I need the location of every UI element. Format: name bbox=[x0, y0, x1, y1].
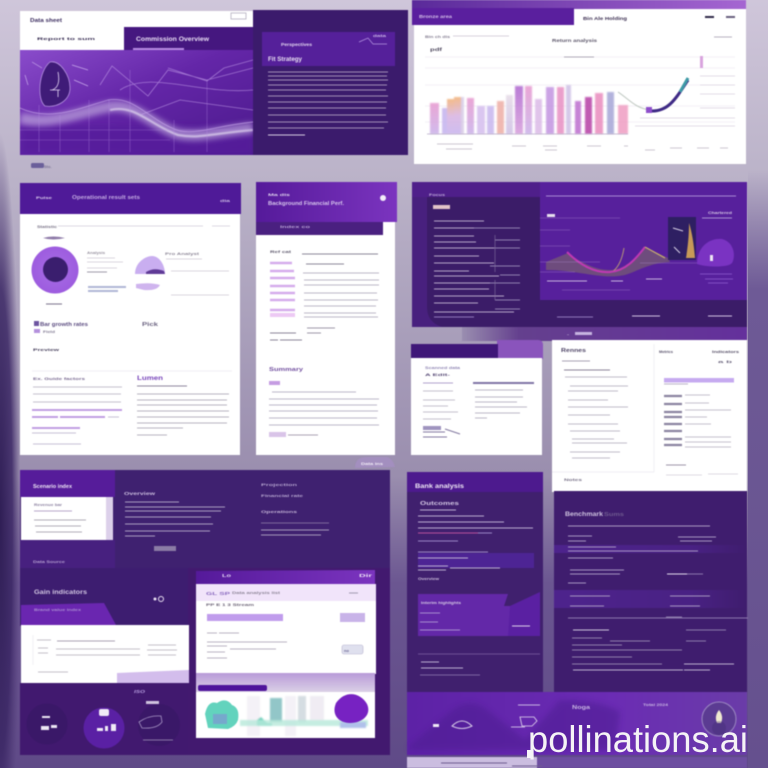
teal bars bbox=[240, 696, 368, 736]
watermark: pollinations.ai bbox=[528, 719, 748, 760]
icon: circle one bbox=[26, 704, 68, 744]
panel: small white list card bbox=[411, 340, 543, 455]
inset spike chart bbox=[668, 217, 696, 260]
metrics list bbox=[429, 193, 520, 312]
panel header bbox=[20, 11, 253, 50]
panel: circular icons: ISO bbox=[134, 689, 146, 694]
half gauge bbox=[135, 256, 165, 290]
page header: Index co bbox=[280, 225, 310, 229]
axis labels bbox=[437, 144, 728, 150]
panel: circular icons bbox=[20, 683, 188, 755]
panel: purple feature card with title: Brand value index bbox=[34, 608, 81, 612]
bottom strip page bbox=[407, 757, 747, 768]
panel: metrics card with header: no bbox=[344, 648, 349, 653]
panel: dark tall column: Outcomes bbox=[420, 501, 459, 507]
panel: wave chart report bbox=[20, 10, 408, 155]
purple orb bbox=[334, 694, 368, 723]
left column text: Notes bbox=[564, 477, 583, 482]
inset white card bbox=[21, 497, 113, 540]
text panel: right summary: Fit Strategy bbox=[268, 57, 303, 63]
text panel: right summary: data bbox=[373, 34, 386, 38]
page header: Background Financial Perf. bbox=[268, 201, 345, 207]
right text column: Operations bbox=[261, 509, 298, 514]
small tag above white report: ~ bbox=[567, 333, 569, 337]
left column text bbox=[561, 348, 628, 482]
donut chart bbox=[32, 246, 78, 304]
panel: donut statistics page: Statistic bbox=[37, 224, 58, 229]
caption tag under first panel: Sto. bbox=[44, 164, 52, 169]
panel: dark top band left bbox=[20, 470, 390, 568]
card text: Scanned data bbox=[425, 366, 460, 370]
purple callout: Interim highlights bbox=[421, 601, 461, 605]
area chart: Chartered bbox=[708, 211, 732, 215]
panel: metrics card with header: Lo bbox=[222, 573, 231, 578]
small tag above white report bbox=[462, 327, 747, 341]
sidebar labels: Ref cat bbox=[270, 249, 292, 254]
panel header: Data sheet bbox=[30, 18, 62, 24]
stat text: Analysis bbox=[87, 250, 106, 255]
band icons and labels: Total 2024 bbox=[643, 702, 669, 707]
tab header: Bin Ale Holding bbox=[583, 16, 627, 21]
lower text block: Summary bbox=[269, 367, 303, 373]
page header bbox=[20, 183, 241, 214]
tab header bbox=[412, 8, 735, 25]
left text column: Ex. Guide factors bbox=[33, 376, 86, 381]
panel: dark wide column bbox=[554, 491, 748, 694]
page header: Operational result sets bbox=[72, 195, 140, 201]
right text column bbox=[261, 482, 329, 535]
section title: Field bbox=[43, 329, 56, 334]
icon: dark leaf emblem bbox=[25, 62, 88, 106]
left text column bbox=[32, 376, 122, 444]
stat text bbox=[87, 250, 229, 295]
teal flower icon bbox=[205, 700, 238, 729]
band icons and labels bbox=[433, 702, 669, 728]
right column text: Indicators bbox=[712, 349, 740, 354]
panel header: Commission Overview bbox=[136, 37, 209, 43]
page header: dia bbox=[220, 198, 231, 203]
panel: metrics card with header: GL SP bbox=[206, 591, 230, 596]
card text: A Edit- bbox=[425, 372, 451, 377]
page header bbox=[256, 182, 397, 235]
inset white card: Revenue bar bbox=[34, 503, 63, 507]
right column text: a b bbox=[718, 360, 732, 364]
icon: circle two bbox=[84, 708, 124, 748]
panel: dark tall column: Overview bbox=[418, 577, 439, 581]
right column text bbox=[659, 349, 740, 475]
panel: dark wide column: Benchmark bbox=[565, 512, 604, 518]
section title: Bar growth rates bbox=[40, 322, 88, 328]
panel: dark wide column: Sums bbox=[604, 512, 624, 518]
bar chart bbox=[430, 85, 628, 134]
panel header: Report to sum bbox=[37, 36, 96, 41]
panel: metrics card with header: Data analysis list bbox=[232, 591, 281, 595]
right column text: Metrics bbox=[659, 350, 673, 354]
panel: dark top band left: Data Source bbox=[33, 560, 65, 564]
panel: metrics card with header: PP E 1 3 Stream bbox=[206, 602, 255, 607]
right text column: Lumen bbox=[137, 376, 163, 382]
panel: bar and line chart: Return analysis bbox=[552, 38, 598, 43]
footer labels bbox=[434, 316, 593, 318]
middle text column: Overview bbox=[124, 491, 156, 496]
metrics list: Focus bbox=[429, 193, 445, 197]
lower text block bbox=[269, 367, 379, 437]
page header: Ma dis bbox=[268, 192, 291, 197]
trend line bbox=[618, 56, 735, 126]
text panel: right summary: Perspectives bbox=[281, 42, 313, 47]
area chart bbox=[540, 196, 736, 290]
panel: dark top band left: Scenario index bbox=[33, 484, 72, 490]
tab header: Bronze area bbox=[419, 14, 453, 19]
panel: metrics card with header bbox=[196, 570, 376, 674]
icon: circle three bbox=[138, 701, 180, 746]
panel: dark area chart report bbox=[412, 182, 747, 327]
wave chart bbox=[20, 60, 253, 155]
panel: bar and line chart: Bin ch dis bbox=[425, 34, 451, 39]
panel: dark tall column bbox=[407, 472, 543, 694]
panel: metrics card with header: Dir bbox=[359, 573, 372, 578]
panel: dark right column behind cards bbox=[188, 568, 390, 755]
panel: narrow text page bbox=[256, 182, 397, 455]
panel: white analysis card bbox=[21, 625, 189, 683]
main text column bbox=[302, 254, 379, 333]
panel: donut statistics page: Preview bbox=[33, 347, 61, 352]
panel: bar and line chart: pdf bbox=[430, 47, 443, 52]
panel: purple feature card with title: Gain indicators bbox=[34, 590, 88, 596]
section title: Pick bbox=[142, 322, 158, 328]
caption tag bottom right of white pages: Data ins bbox=[361, 461, 384, 466]
icon: glowing bulb bbox=[702, 702, 736, 736]
panel: bottom purple band bbox=[407, 692, 747, 755]
right text column bbox=[137, 376, 229, 435]
caption tag bottom right of white pages bbox=[355, 457, 395, 468]
panel: bar and line chart bbox=[412, 0, 746, 164]
page header: Pulse bbox=[36, 195, 53, 200]
left column text: Rennes bbox=[561, 348, 586, 354]
right text column: Financial rate bbox=[261, 493, 304, 498]
panel: dark tall column: Bank analysis bbox=[415, 484, 465, 490]
panel: donut statistics page bbox=[20, 183, 241, 455]
panel: white two-column report bbox=[552, 340, 747, 492]
band icons and labels: Noga bbox=[572, 705, 590, 711]
sidebar labels bbox=[270, 249, 302, 340]
purple orb bbox=[697, 239, 734, 283]
text panel: right summary bbox=[262, 32, 395, 135]
panel: purple feature card with title bbox=[20, 568, 188, 626]
panel: teal chart card bbox=[196, 673, 375, 738]
caption tag under first panel bbox=[31, 163, 52, 169]
middle text column bbox=[124, 491, 225, 551]
stat text: Pro Analyst bbox=[165, 251, 200, 256]
right text column: Projection bbox=[261, 482, 298, 487]
section title bbox=[34, 321, 158, 334]
purple callout bbox=[418, 592, 540, 636]
card text bbox=[423, 366, 534, 437]
